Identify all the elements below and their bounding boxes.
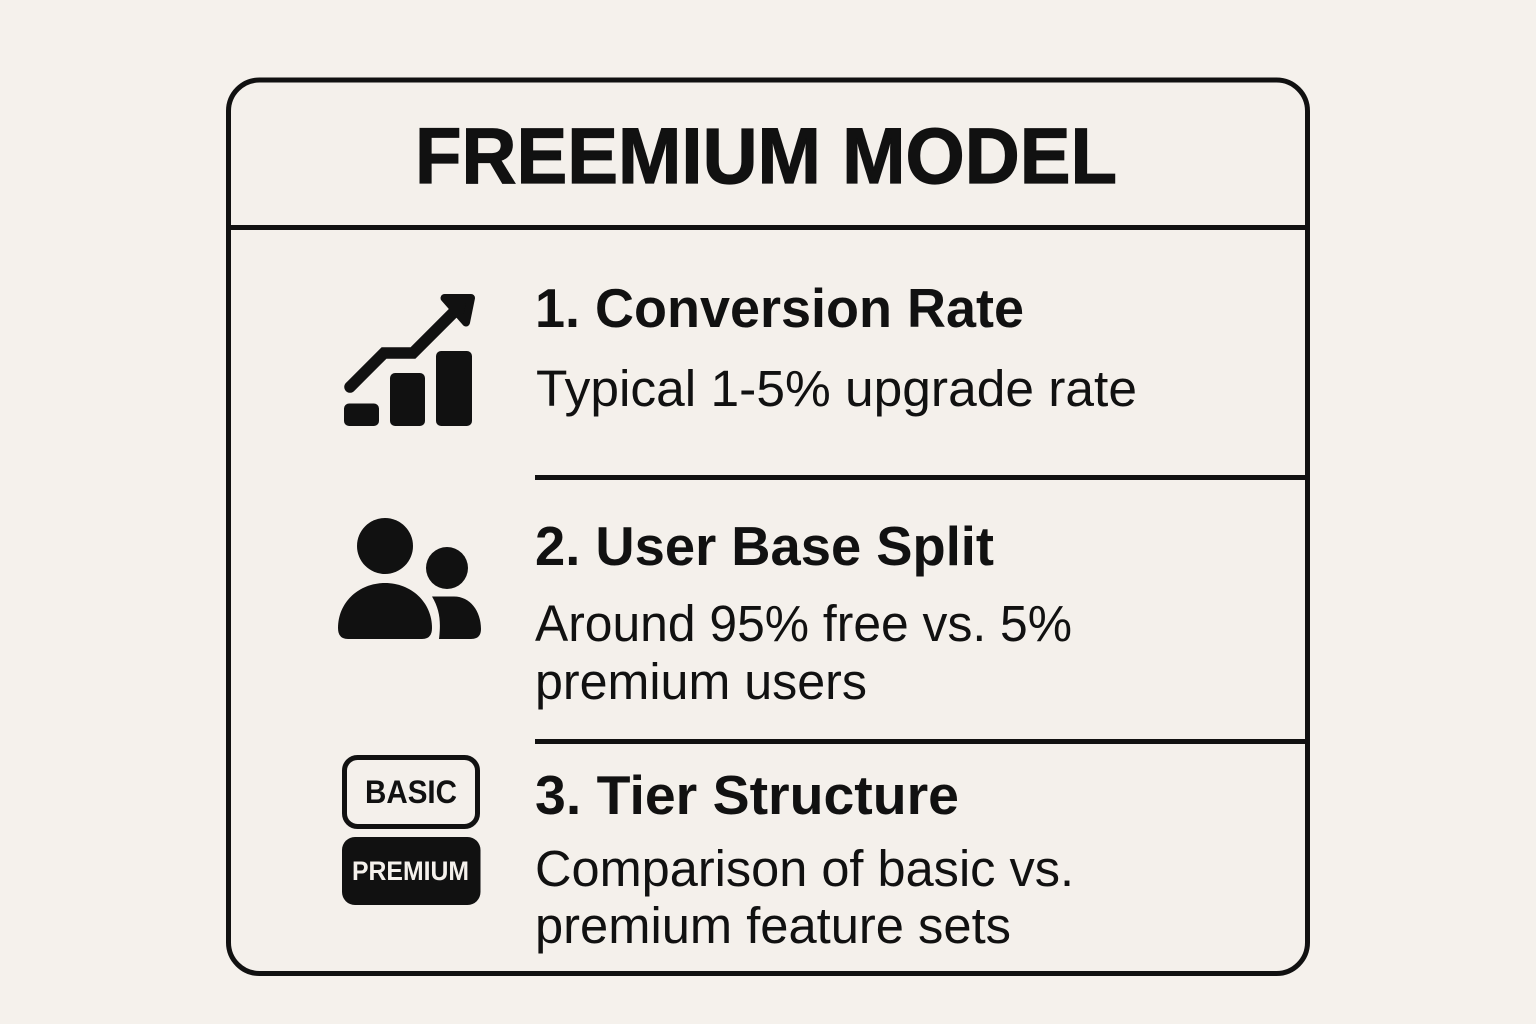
- heading: tier structure: 3. Tier Structure: [535, 764, 959, 826]
- icon: premium tier badge: [342, 837, 480, 905]
- text: tier structure description: premium feature sets: [535, 897, 1011, 954]
- text: conversion rate description: Typical 1-5% upgrade rate: [536, 360, 1137, 417]
- icon: basic tier badge: BASIC: [365, 774, 457, 810]
- heading: conversion rate: 1. Conversion Rate: [535, 277, 1024, 339]
- text: user base split description: [535, 595, 1072, 710]
- heading: user base split: 2. User Base Split: [535, 515, 994, 577]
- text: user base split description: premium users: [535, 653, 867, 710]
- title: FREEMIUM MODEL: [415, 111, 1117, 200]
- text: user base split description: Around 95% free vs. 5%: [535, 595, 1072, 652]
- text: tier structure description: Comparison of basic vs.: [535, 840, 1074, 897]
- icon: basic tier badge: [344, 758, 478, 826]
- icon: two users: [338, 518, 481, 639]
- panel: freemium model card: [228, 80, 1308, 974]
- icon: premium tier badge: PREMIUM: [352, 856, 469, 886]
- text: tier structure description: [535, 840, 1074, 954]
- icon: growth chart with rising arrow: [344, 298, 472, 426]
